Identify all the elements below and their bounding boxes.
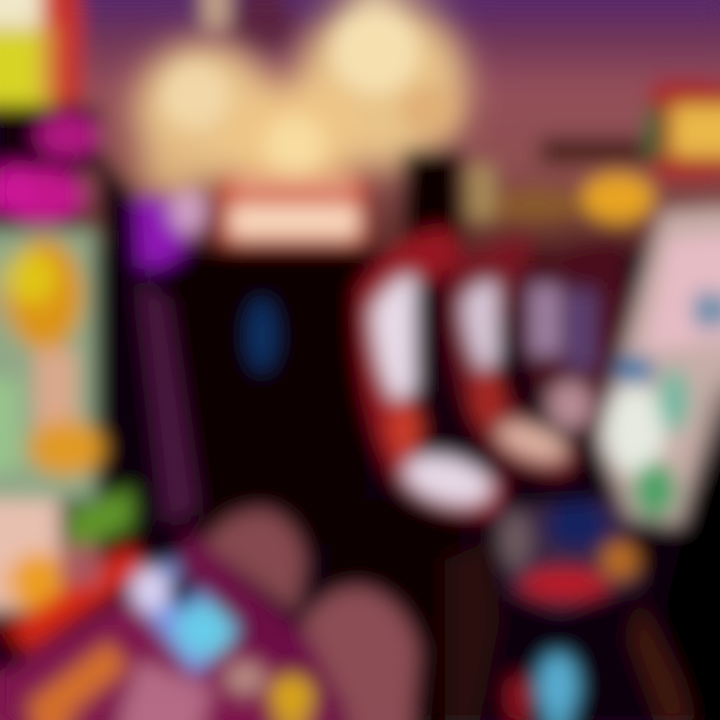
purple side strip (138, 280, 198, 525)
bottom right blue light (508, 600, 692, 720)
left lower panels (0, 488, 145, 652)
magenta diagonal band (175, 530, 365, 720)
bottom mauve round buttons (205, 510, 418, 720)
dark column behind lights (403, 150, 463, 245)
wall shelf and amber light (468, 138, 655, 222)
machine arc one (358, 228, 505, 515)
machine arc two (448, 234, 578, 476)
right colourful slot screen (598, 208, 720, 525)
far right dark edge (665, 370, 720, 720)
row of slot machines with red and white arcs (358, 228, 628, 515)
bottom left magenta console (0, 590, 360, 720)
left dark band and magenta lights (0, 108, 206, 268)
background: ceiling and wall (80, 0, 720, 250)
bottom blue and white button (128, 550, 248, 676)
left slot machine screen (0, 230, 104, 500)
central dark machine (170, 245, 460, 720)
top right machine lights (646, 80, 720, 180)
left dark machine frame strip (98, 150, 152, 540)
bottom yellow spot (225, 662, 314, 719)
group: ceiling lights (135, 0, 466, 207)
sign: red and white lit panel (222, 176, 364, 250)
left edge top colour block (0, 0, 82, 105)
machine arc three (515, 238, 628, 432)
dark ceiling patch (228, 0, 296, 52)
blue glow on central machine (248, 299, 276, 371)
lower right control deck (445, 498, 642, 720)
